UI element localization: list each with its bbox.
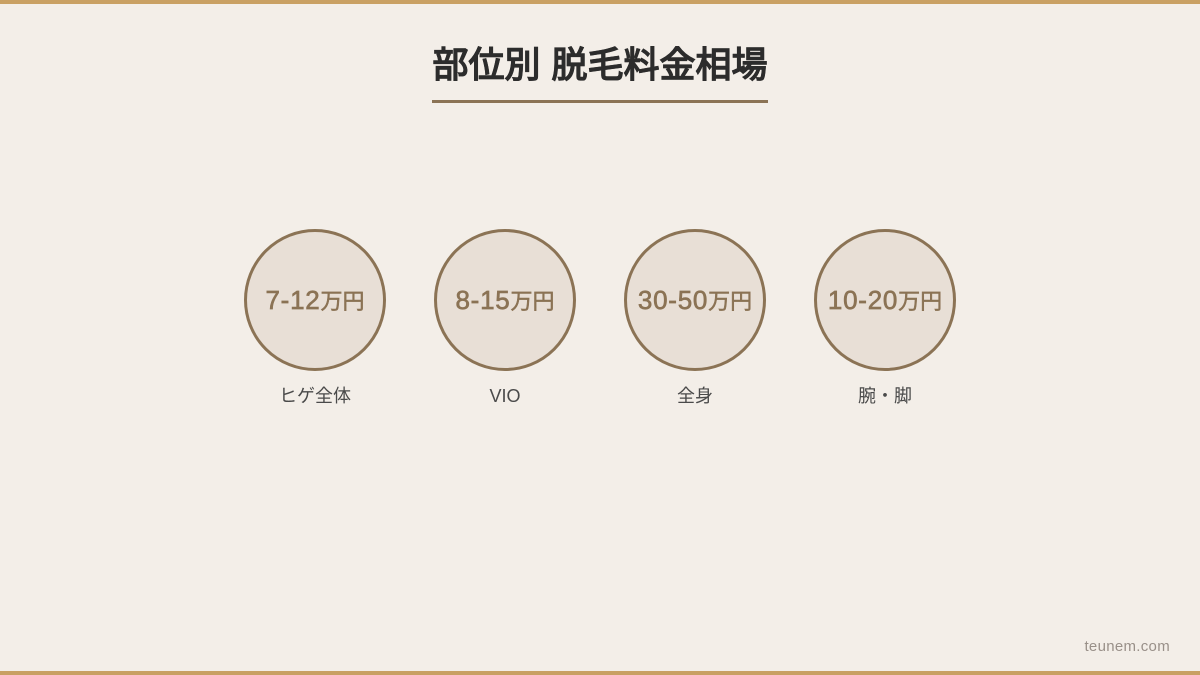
item: arms and legs xyxy=(814,229,956,408)
price circle: arms and legs: 10-20万円 xyxy=(828,285,942,315)
title xyxy=(432,36,768,103)
label: arms and legs: 腕・脚 xyxy=(858,382,912,408)
price circle: full body: 30-50万円 xyxy=(638,285,752,315)
price circle: beard xyxy=(244,229,386,371)
label: full body: 全身 xyxy=(677,386,713,406)
price circle: VIO xyxy=(434,229,576,371)
item: beard xyxy=(244,229,386,406)
price circle: VIO: 8-15万円 xyxy=(455,285,555,315)
price circle: beard: 7-12万円 xyxy=(265,285,365,315)
label: VIO: VIO xyxy=(489,386,520,406)
item: VIO xyxy=(434,229,576,406)
top accent bar xyxy=(0,0,1200,4)
price circle: full body xyxy=(624,229,766,371)
title: 部位別 脱毛料金相場 xyxy=(432,44,768,85)
item: full body xyxy=(624,229,766,406)
label: beard: ヒゲ全体 xyxy=(279,386,351,406)
footer brand: teunem.com xyxy=(1084,638,1170,655)
price circle: arms and legs xyxy=(814,229,956,371)
bottom accent bar xyxy=(0,671,1200,675)
